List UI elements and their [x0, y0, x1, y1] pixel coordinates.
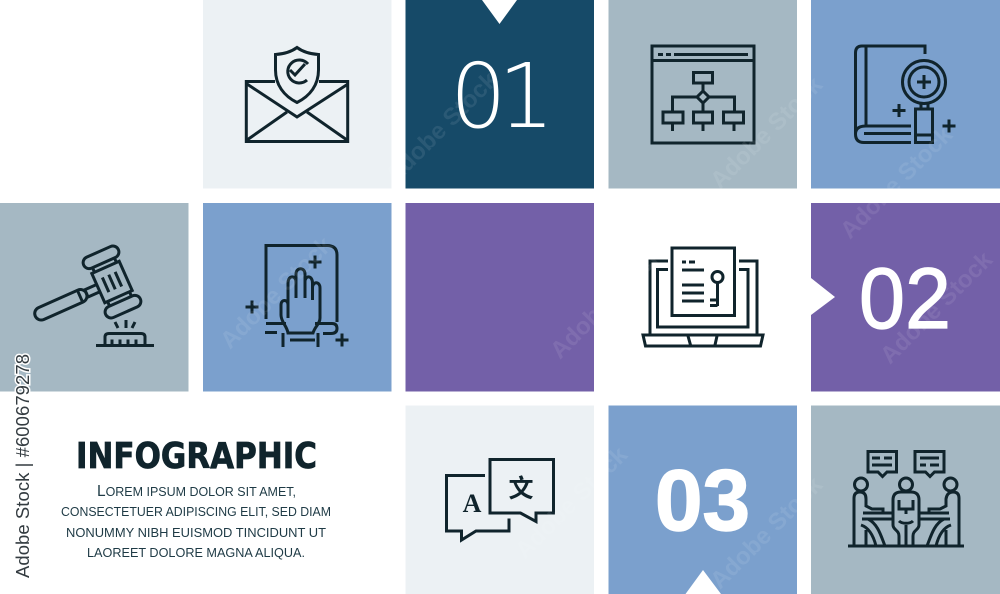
watermark pattern: Adobe Stock — [545, 241, 668, 364]
panel: meeting — [811, 406, 1000, 594]
icon: flowchart window — [652, 46, 754, 143]
watermark pattern: Adobe Stock — [510, 441, 633, 564]
title: INFOGRAPHIC — [76, 436, 317, 477]
panel: oath — [203, 203, 392, 392]
panel: number 02 — [811, 203, 1000, 392]
icon: oath hand on book — [246, 246, 348, 347]
letter A: A — [463, 489, 482, 518]
panel: shield mail — [203, 0, 392, 188]
text block: description: NONUMMY NIBH EUISMOD TINCIDUNT UT — [66, 526, 326, 540]
text block: description: LAOREET DOLORE MAGNA ALIQUA. — [87, 546, 305, 560]
panel: translation — [406, 406, 594, 594]
number 01: 0 — [450, 44, 507, 148]
number 01: 1 — [498, 44, 555, 148]
watermark pattern: Adobe Stock — [705, 71, 828, 194]
icon: meeting — [848, 452, 964, 546]
text block: description: LOREM IPSUM DOLOR SIT AMET, — [97, 483, 296, 500]
icon: translation bubbles — [446, 460, 554, 540]
watermark pattern: Adobe Stock — [380, 66, 503, 189]
icon: laptop with key document — [643, 248, 763, 346]
panel: flowchart — [608, 0, 797, 188]
watermark pattern: Adobe Stock — [705, 471, 828, 594]
text block: description — [61, 483, 331, 560]
icon: book with magnifier — [856, 46, 956, 142]
panel: number 01 — [406, 0, 594, 188]
icon: gavel — [22, 244, 154, 346]
watermark pattern: Adobe Stock — [835, 121, 958, 244]
icon: shield envelope — [246, 48, 348, 142]
letter Chinese: 文 — [508, 469, 534, 505]
number 02: 02 — [859, 251, 951, 347]
watermark pattern — [215, 66, 998, 594]
number 03: 03 — [655, 453, 750, 549]
panel: gavel — [0, 203, 188, 392]
watermark pattern: Adobe Stock — [875, 246, 998, 369]
watermark pattern: Adobe Stock — [215, 231, 338, 354]
panel: purple blank — [406, 203, 594, 392]
panel: book search — [811, 0, 1000, 188]
text block: description: CONSECTETUER ADIPISCING ELIT, SED DIAM — [61, 505, 331, 519]
stock id label: Adobe Stock | #600679278 — [12, 354, 33, 578]
panel: number 03 — [608, 406, 797, 594]
